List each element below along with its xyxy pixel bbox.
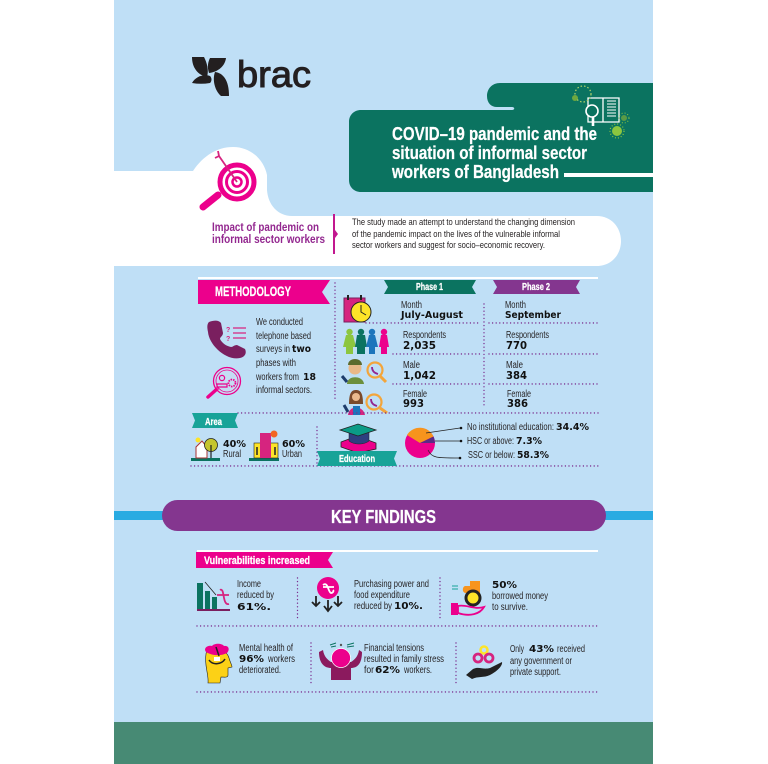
logo wordmark: brac	[237, 54, 311, 95]
phase 2 ribbon	[493, 280, 580, 294]
methodology text: telephone based	[256, 331, 311, 342]
purchasing text: Purchasing power and	[354, 579, 429, 590]
phase 2 values: 386	[507, 398, 528, 410]
mental health text: workers	[267, 654, 295, 665]
phase 1 ribbon: Phase 1	[416, 282, 443, 293]
panel: phases table	[342, 280, 580, 415]
heading: impact	[212, 220, 325, 246]
icon: calendar and clock	[344, 295, 371, 322]
phase 2 values: Female	[507, 389, 531, 400]
finding: mental health	[205, 643, 295, 683]
methodology text: workers from	[255, 372, 299, 383]
phase 2 values: 770	[506, 340, 527, 352]
mental health text	[239, 643, 295, 676]
methodology text: informal sectors.	[256, 385, 312, 396]
icon: taka with arrows	[312, 577, 342, 611]
family stress text: for	[364, 665, 375, 676]
icon: male worker	[342, 359, 386, 384]
logo: brac	[192, 54, 311, 96]
icon: stressed person	[319, 643, 362, 680]
purchasing text: food expenditure	[354, 590, 410, 601]
methodology ribbon: METHODOLOGY	[215, 283, 291, 299]
phase 1 values: Female	[403, 389, 427, 400]
finding: support	[466, 644, 585, 679]
support text: any government or	[510, 656, 572, 667]
support text: received	[557, 644, 585, 655]
support text: private support.	[510, 667, 561, 678]
purchasing text	[354, 579, 429, 612]
borrowed text: to survive.	[492, 602, 528, 613]
icon: magnifier with people	[208, 368, 240, 397]
phase 2 values: 384	[506, 370, 527, 382]
panel: title	[349, 83, 653, 192]
bottom band	[114, 722, 653, 764]
icon: falling bars	[197, 582, 230, 611]
family stress text: Financial tensions	[364, 643, 424, 654]
divider arrow	[333, 214, 338, 254]
methodology text	[255, 317, 316, 396]
phase 1 values: 1,042	[403, 370, 436, 382]
icon: hand with gears	[466, 646, 502, 679]
family stress text	[364, 643, 444, 676]
pie chart	[405, 427, 462, 459]
key findings banner	[114, 500, 653, 531]
finding: purchasing power	[312, 577, 429, 612]
phase 1 values: 993	[403, 398, 424, 410]
area ribbon: Area	[205, 417, 222, 428]
income text: reduced by	[237, 590, 274, 601]
icon: respondents	[343, 329, 389, 354]
icon: head with cloud	[205, 644, 232, 683]
icon: telephone: ?	[226, 327, 230, 334]
icon: rural	[191, 438, 220, 461]
phase 1 values	[400, 300, 463, 410]
support text: Only	[510, 644, 524, 655]
mental health text: Mental health of	[239, 643, 293, 654]
methodology text: 18	[303, 372, 316, 383]
methodology text: surveys in	[256, 344, 290, 355]
icon: female worker	[344, 390, 387, 415]
purchasing text: 10%.	[394, 601, 423, 612]
phase 1 values: Male	[403, 360, 420, 371]
title: COVID–19 pandemic and the	[392, 124, 597, 144]
phase 1 ribbon	[384, 280, 476, 294]
pie legend: 34.4%	[556, 422, 589, 433]
title: situation of informal sector	[392, 143, 587, 163]
title: workers of Bangladesh	[391, 162, 559, 182]
rural stat	[223, 439, 246, 460]
phase 1 values: July-August	[400, 310, 463, 321]
page background	[114, 0, 653, 764]
pie legend: 7.3%	[516, 436, 542, 447]
rural stat: Rural	[223, 449, 241, 460]
panel: education	[317, 422, 589, 466]
phase 2 ribbon: Phase 2	[522, 282, 550, 293]
white intro band	[114, 147, 621, 266]
phase 1 values: Month	[401, 300, 422, 311]
phase 2 values: Male	[506, 360, 523, 371]
phase 2 values: September	[505, 310, 561, 321]
intro text: of the pandemic impact on the lives of the vulnerable informal	[352, 229, 560, 240]
finding: family stress	[319, 643, 444, 680]
support text: 43%	[529, 644, 554, 655]
borrowed text: borrowed money	[492, 591, 548, 602]
income text	[237, 579, 274, 613]
panel: area	[191, 413, 305, 461]
intro text: The study made an attempt to understand the changing dimension	[352, 217, 575, 228]
family stress text: 62%	[375, 665, 400, 676]
purchasing text: reduced by	[354, 601, 392, 612]
urban stat	[282, 439, 305, 460]
pie legend: HSC or above:	[467, 436, 514, 447]
education ribbon	[317, 451, 397, 466]
finding: income	[197, 579, 274, 613]
panel: methodology	[198, 280, 330, 397]
mental health text: 96%	[239, 654, 264, 665]
family stress text: resulted in family stress	[364, 654, 444, 665]
education ribbon: Education	[339, 453, 375, 465]
methodology text: phases with	[256, 358, 296, 369]
intro text	[352, 217, 575, 251]
pie legend	[467, 422, 589, 461]
phase 2 values	[505, 300, 561, 410]
family stress text: workers.	[403, 665, 432, 676]
mental health text: deteriorated.	[239, 665, 281, 676]
heading: impact: Impact of pandemic on	[212, 220, 319, 234]
icon: target magnifier	[203, 151, 254, 207]
pie legend: 58.3%	[517, 450, 549, 461]
title	[391, 124, 597, 182]
support text	[510, 644, 585, 678]
methodology text: We conducted	[256, 317, 303, 328]
phase 1 values: 2,035	[403, 340, 436, 352]
icon: book, magnifier and virus	[572, 86, 629, 138]
phase 2 values: Month	[505, 300, 526, 311]
vulnerabilities ribbon: Vulnerabilities increased	[204, 555, 310, 567]
pie legend: No institutional education:	[467, 422, 554, 433]
phase 2 values: Respondents	[506, 330, 549, 341]
key findings banner: KEY FINDINGS	[331, 507, 436, 527]
icon: telephone: ?	[226, 336, 230, 343]
urban stat: 60%	[282, 439, 305, 450]
phase 1 values: Respondents	[403, 330, 446, 341]
icon: pinwheel	[192, 57, 229, 96]
heading: impact: informal sector workers	[212, 232, 325, 246]
rural stat: 40%	[223, 439, 246, 450]
icon: hand and coin	[451, 581, 484, 615]
borrowed text	[492, 580, 548, 613]
title background	[349, 83, 653, 192]
intro text: sector workers and suggest for socio–economic recovery.	[352, 240, 545, 251]
title underline	[564, 173, 653, 177]
icon: telephone	[207, 321, 246, 358]
income text: Income	[237, 579, 261, 590]
pie legend: SSC or below:	[468, 450, 515, 461]
icon: urban	[249, 430, 279, 461]
borrowed text: 50%	[492, 580, 517, 591]
finding: borrowed money	[451, 580, 548, 615]
icon: graduation cap on books	[340, 424, 376, 453]
income text: 61%.	[237, 602, 271, 613]
urban stat: Urban	[282, 449, 302, 460]
methodology text: two	[292, 344, 311, 355]
